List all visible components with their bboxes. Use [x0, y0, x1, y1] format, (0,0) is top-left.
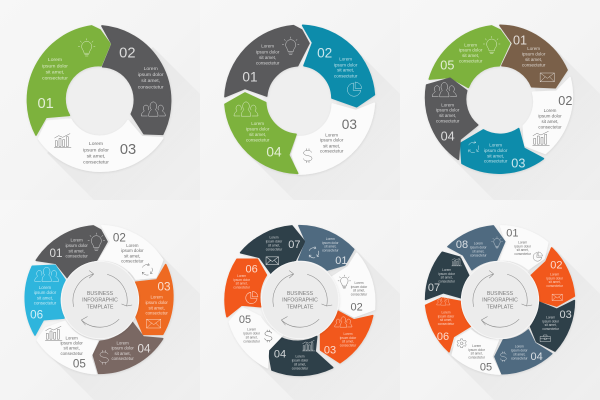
segment 02: 02: [113, 232, 126, 245]
segment 04: consectetur: [436, 119, 460, 124]
segment 03: consectetur: [83, 160, 109, 166]
segment 03: 03: [120, 142, 136, 158]
segment 06: 06: [246, 263, 258, 275]
center hub: TEMPLATE: [487, 304, 514, 310]
segment 03: Lorem: [546, 315, 556, 319]
segment 01: [36, 226, 107, 278]
segment 01: ipsum dolor: [322, 241, 340, 245]
segment 03: Lorem: [343, 332, 353, 336]
segment 02: ipsum dolor: [138, 72, 164, 78]
segment 02: [303, 25, 374, 107]
segment 03: sit amet,: [323, 143, 340, 148]
segment 05: consectetur: [459, 59, 483, 64]
segment 07: [426, 252, 470, 299]
segment 01: consectetur: [42, 76, 68, 82]
segment 02: sit amet,: [541, 119, 559, 124]
segment 03: [135, 265, 173, 334]
segment 03: [39, 119, 163, 171]
segment 03: [531, 301, 574, 351]
segment 01: sit amet,: [517, 248, 529, 252]
segment 03: consectetur: [320, 149, 344, 154]
segment 03: 03: [324, 344, 336, 356]
center hub: BUSINESS: [287, 291, 314, 297]
segment 06: [225, 259, 266, 317]
segment 03: 03: [511, 156, 525, 170]
segment 01: 01: [242, 69, 258, 84]
segment 04: ipsum dolor: [292, 359, 309, 363]
segment 01: 01: [335, 255, 347, 267]
segment 07: sit amet,: [268, 243, 280, 247]
segment 04: [269, 337, 333, 375]
segment 06: ipsum dolor: [233, 278, 251, 282]
segment 05: sit amet,: [462, 53, 479, 58]
segment 06: consectetur: [34, 300, 57, 305]
segment 04: [426, 78, 478, 159]
segment 01: Lorem: [527, 46, 540, 51]
segment 03: ipsum dolor: [484, 148, 508, 153]
segment 03: consectetur: [145, 310, 168, 315]
segment 02: consectetur: [334, 73, 358, 78]
center hub: [461, 261, 539, 339]
center hub: [61, 261, 139, 339]
segment 03: 03: [342, 117, 357, 132]
segment 02: Lorem: [544, 108, 557, 113]
segment 05: consectetur: [243, 339, 261, 343]
segment 06: consectetur: [233, 286, 251, 290]
segment 07: consectetur: [438, 280, 456, 284]
segment 04: sit amet,: [114, 351, 131, 356]
segment 01: sit amet,: [68, 248, 85, 253]
segment 03: consectetur: [340, 344, 357, 348]
segment 05: Lorem: [247, 328, 257, 332]
segment 01: 01: [513, 34, 527, 48]
segment 06: 06: [437, 331, 449, 343]
segment 05: 05: [480, 361, 492, 373]
segment 02: ipsum dolor: [351, 285, 368, 289]
center hub: INFOGRAPHIC: [82, 298, 118, 304]
segment 05: Lorem: [464, 42, 477, 47]
center hub: TEMPLATE: [87, 304, 114, 310]
segment 01: ipsum dolor: [522, 52, 546, 57]
segment 03: ipsum dolor: [542, 319, 560, 323]
segment 02: [102, 26, 171, 134]
segment 06: sit amet,: [37, 295, 53, 300]
segment 03: sit amet,: [487, 153, 504, 158]
segment 04: consectetur: [511, 356, 529, 360]
segment 02: [523, 78, 572, 153]
segment 02: sit amet,: [353, 289, 365, 293]
segment 04: ipsum dolor: [511, 349, 529, 353]
segment 07: Lorem: [269, 236, 279, 240]
segment 05: consectetur: [60, 351, 83, 356]
segment 05: [452, 330, 500, 374]
segment 01: 01: [506, 227, 518, 239]
segment 02: sit amet,: [141, 78, 160, 84]
segment 03: sit amet,: [148, 305, 165, 310]
segment 01: ipsum dolor: [65, 243, 88, 248]
segment 04: consectetur: [246, 138, 270, 143]
segment 02: ipsum dolor: [121, 248, 144, 253]
segment 04: Lorem: [295, 355, 305, 359]
segment 03: consectetur: [484, 159, 508, 164]
segment 01: Lorem: [48, 57, 62, 63]
panel: eight-step cycle: [400, 200, 600, 400]
panel: four-step cycle: [200, 0, 400, 200]
segment 07: 07: [428, 282, 440, 294]
segment 02: sit amet,: [337, 68, 354, 73]
segment 01: [501, 226, 548, 269]
segment 04: sit amet,: [513, 352, 525, 356]
segment 02: ipsum dolor: [538, 113, 562, 118]
segment 02: Lorem: [550, 272, 560, 276]
segment 05: Lorem: [472, 344, 482, 348]
segment 06: Lorem: [237, 274, 247, 278]
segment 03: 03: [560, 309, 572, 321]
segment 01: consectetur: [514, 252, 532, 256]
segment 02: [332, 253, 375, 317]
segment 04: [93, 322, 163, 373]
segment 05: consectetur: [468, 356, 486, 360]
segment 04: [225, 93, 298, 173]
segment 04: ipsum dolor: [111, 346, 134, 351]
segment 01: consectetur: [256, 60, 280, 65]
segment 05: ipsum dolor: [459, 48, 483, 53]
segment 05: ipsum dolor: [243, 332, 261, 336]
segment 02: sit amet,: [549, 280, 561, 284]
center hub: INFOGRAPHIC: [482, 298, 518, 304]
segment 02: Lorem: [354, 281, 364, 285]
segment 01: ipsum dolor: [42, 64, 68, 70]
segment 03: Lorem: [489, 143, 502, 148]
segment 05: ipsum dolor: [60, 341, 83, 346]
segment 04: sit amet,: [249, 132, 266, 137]
segment 04: ipsum dolor: [436, 108, 460, 113]
segment 02: consectetur: [546, 284, 564, 288]
segment 06: ipsum dolor: [438, 314, 455, 318]
segment 05: sit amet,: [63, 346, 80, 351]
segment 03: ipsum dolor: [320, 138, 344, 143]
panel: three-step cycle: [0, 0, 200, 200]
segment 01: Lorem: [261, 44, 274, 49]
segment 02: Lorem: [339, 57, 352, 62]
center hub: TEMPLATE: [287, 304, 314, 310]
segment 01: [500, 25, 567, 88]
panel: six-step cycle: [0, 200, 200, 400]
segment 02: 02: [550, 259, 562, 271]
segment 04: consectetur: [111, 356, 134, 361]
segment 04: [495, 330, 552, 374]
segment 05: 05: [73, 357, 86, 370]
segment 01: Lorem: [71, 238, 83, 243]
segment 01: 01: [38, 96, 54, 112]
segment 03: [461, 129, 543, 173]
segment 07: ipsum dolor: [438, 272, 456, 276]
segment 03: sit amet,: [545, 323, 557, 327]
segment 02: 02: [351, 302, 363, 314]
segment 07: sit amet,: [441, 276, 453, 280]
segment 04: Lorem: [515, 345, 524, 349]
segment 04: 04: [274, 349, 286, 361]
segment 03: [292, 103, 374, 174]
segment 01: ipsum dolor: [514, 244, 532, 248]
panel: five-step cycle: [400, 0, 600, 200]
segment 02: ipsum dolor: [546, 276, 564, 280]
segment 07: consectetur: [266, 247, 283, 251]
segment 01: [299, 226, 354, 270]
segment 07: [241, 226, 305, 274]
segment 01: consectetur: [522, 63, 546, 68]
segment 03: [321, 311, 373, 363]
panel: seven-step cycle: [200, 200, 400, 400]
segment 08: ipsum dolor: [470, 246, 488, 250]
segment 08: [448, 226, 505, 270]
segment 01: ipsum dolor: [256, 49, 280, 54]
segment 07: Lorem: [442, 268, 452, 272]
segment 02: [99, 226, 163, 279]
segment 01: Lorem: [518, 240, 528, 244]
segment 02: [530, 248, 574, 306]
segment 08: 08: [456, 239, 468, 251]
segment 07: 07: [288, 239, 300, 251]
segment 01: [225, 26, 309, 97]
segment 05: [429, 26, 510, 87]
segment 08: sit amet,: [472, 249, 484, 253]
segment 01: sit amet,: [46, 70, 64, 76]
segment 01: consectetur: [65, 253, 88, 258]
segment 02: consectetur: [538, 124, 562, 129]
segment 05: sit amet,: [246, 335, 258, 339]
segment 06: sit amet,: [440, 318, 452, 322]
segment 01: 01: [50, 247, 62, 260]
segment 03: 03: [158, 281, 170, 294]
segment 04: 04: [138, 343, 151, 356]
segment 01: sit amet,: [324, 245, 336, 249]
segment 04: sit amet,: [439, 113, 456, 118]
segment 08: Lorem: [474, 242, 483, 246]
segment 01: sit amet,: [525, 57, 542, 62]
segment 03: sit amet,: [87, 154, 105, 160]
segment 03: ipsum dolor: [83, 147, 109, 153]
segment 03: Lorem: [151, 295, 163, 300]
segment 05: [37, 321, 97, 374]
segment 02: consectetur: [121, 258, 144, 263]
segment 06: [25, 265, 65, 335]
segment 02: consectetur: [351, 293, 368, 297]
segment 04: 04: [441, 129, 455, 143]
segment 08: consectetur: [470, 253, 488, 257]
segment 01: [27, 26, 110, 135]
segment 04: consectetur: [292, 366, 309, 370]
segment 01: sit amet,: [259, 55, 276, 60]
segment 02: Lorem: [126, 243, 139, 248]
segment 01: consectetur: [322, 249, 340, 253]
center hub: [261, 261, 339, 339]
segment 02: sit amet,: [124, 253, 141, 258]
segment 04: 04: [531, 351, 543, 363]
segment 05: 05: [239, 314, 251, 326]
segment 03: ipsum dolor: [145, 300, 168, 305]
segment 02: 02: [119, 45, 135, 61]
segment 02: consectetur: [138, 85, 164, 91]
center hub: BUSINESS: [87, 291, 114, 297]
segment 02: 02: [558, 94, 572, 108]
segment 02: ipsum dolor: [334, 62, 358, 67]
segment 04: 04: [266, 145, 282, 160]
center hub: INFOGRAPHIC: [282, 298, 318, 304]
segment 04: Lorem: [441, 102, 454, 107]
segment 06: consectetur: [438, 322, 455, 326]
center hub: BUSINESS: [487, 291, 514, 297]
segment 05: ipsum dolor: [468, 348, 486, 352]
segment 03: sit amet,: [342, 340, 354, 344]
segment 03: consectetur: [542, 327, 560, 331]
segment 06: Lorem: [441, 310, 451, 314]
segment 05: [229, 307, 283, 368]
segment 02: Lorem: [144, 66, 158, 72]
segment 06: ipsum dolor: [34, 290, 57, 295]
segment 04: sit amet,: [294, 362, 306, 366]
segment 03: Lorem: [325, 132, 338, 137]
segment 05: 05: [440, 58, 454, 72]
segment 04: Lorem: [251, 121, 264, 126]
segment 03: Lorem: [89, 141, 103, 147]
segment 06: 06: [30, 308, 43, 321]
segment 01: Lorem: [326, 237, 335, 241]
segment 04: ipsum dolor: [246, 127, 270, 132]
segment 07: ipsum dolor: [266, 240, 283, 244]
segment 06: [426, 297, 471, 352]
segment 06: sit amet,: [236, 282, 248, 286]
segment 05: Lorem: [66, 335, 78, 340]
segment 03: ipsum dolor: [340, 336, 357, 340]
segment 02: 02: [317, 45, 332, 60]
segment 06: Lorem: [39, 285, 52, 290]
segment 04: Lorem: [117, 341, 129, 346]
segment 05: sit amet,: [471, 352, 483, 356]
